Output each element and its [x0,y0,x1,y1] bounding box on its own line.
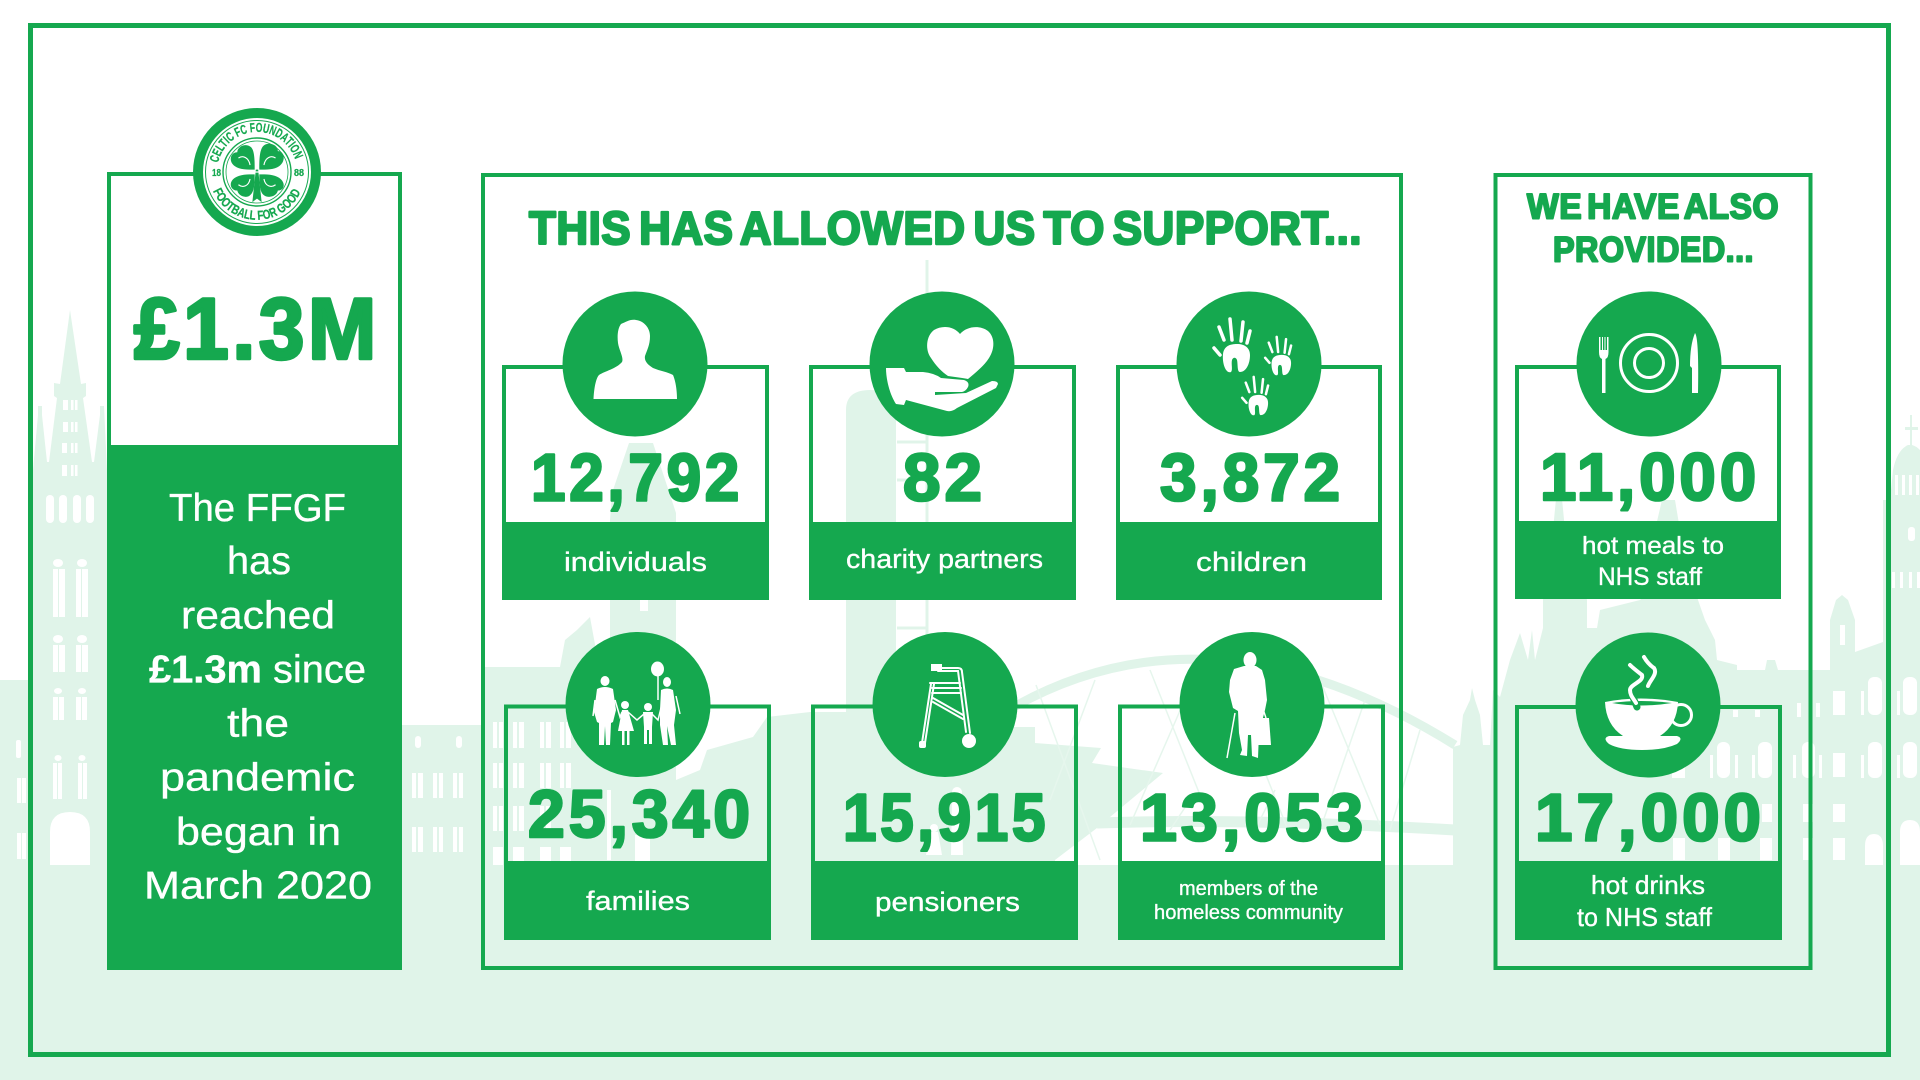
card: hot meals [1515,292,1781,599]
label: children [1196,547,1307,577]
icon: hand holding heart [870,292,1014,436]
number: 11,000 [1540,440,1760,515]
panel: green description block [107,445,402,970]
number: 15,915 [843,780,1049,856]
icon: handprints [1176,292,1322,436]
label: to NHS staff [1577,902,1713,932]
panel: we have also provided [1496,175,1810,968]
label [1154,878,1343,924]
description text: pandemic [160,756,355,800]
label: charity partners [846,544,1043,574]
number: 17,000 [1535,780,1765,856]
card: hot drinks [1515,632,1782,940]
description text: the [227,702,289,746]
panel outline [483,175,1401,968]
label [1577,870,1713,932]
panel outline [1496,175,1810,968]
logo: Celtic FC Foundation: CELTIC FC FOUNDATION [210,122,304,162]
card: pensioners [811,632,1078,940]
number: 3,872 [1160,440,1344,516]
label: NHS staff [1598,563,1702,591]
label: families [586,886,690,916]
panel outline [109,174,400,968]
panel: total raised [107,108,402,970]
logo: Celtic FC Foundation [193,108,321,236]
label: members of the [1179,878,1318,900]
description text: £1.3m since [149,648,366,692]
label: hot meals to [1582,532,1724,560]
card: individuals [502,292,769,600]
logo: Celtic FC Foundation: FOOTBALL FOR GOOD [213,187,300,220]
label: hot drinks [1591,870,1705,900]
logo: Celtic FC Foundation: 18 [212,168,221,179]
description text [144,487,372,908]
number: 25,340 [528,777,754,852]
icon: walking frame [872,632,1018,777]
label: individuals [564,547,707,577]
heading [1527,188,1779,270]
label: pensioners [875,887,1020,917]
panel: this has allowed us to support [483,175,1401,968]
logo: Celtic FC Foundation: 88 [294,168,304,179]
icon: steaming cup [1576,632,1720,778]
icon: person [562,292,708,436]
description text: March 2020 [144,864,372,908]
number: 13,053 [1140,780,1367,856]
description text: reached [181,594,335,638]
description text: has [227,540,291,583]
icon: elderly person with cane and bag [1180,632,1324,777]
card: children [1116,292,1382,600]
description text: The FFGF [169,487,346,530]
card: charity partners [809,292,1076,600]
description text: began in [176,811,341,854]
heading: PROVIDED... [1553,230,1754,270]
card: families [504,632,771,940]
big figure: £1.3M [134,282,380,378]
heading: THIS HAS ALLOWED US TO SUPPORT... [529,202,1362,254]
label [1582,532,1724,591]
icon: plate and cutlery [1576,292,1722,436]
label: homeless community [1154,902,1343,924]
card: homeless community [1118,632,1385,940]
icon: family with balloon [566,632,710,777]
heading: WE HAVE ALSO [1527,188,1779,226]
number: 12,792 [531,440,743,516]
number: 82 [903,440,986,516]
